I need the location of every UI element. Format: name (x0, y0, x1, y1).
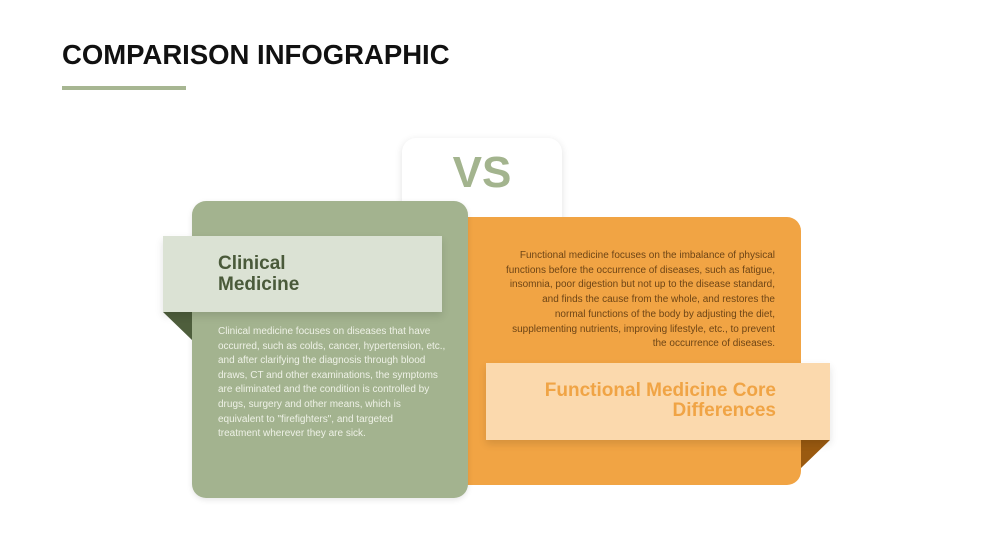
VS badge: VS (453, 148, 511, 197)
functional body text: supplementing nutrients, improving lifestyle, etc., to prevent (512, 324, 775, 335)
functional body text: functions before the occurrence of diseases, such as fatigue, (506, 265, 775, 276)
VS badge (402, 138, 562, 238)
title: COMPARISON INFOGRAPHIC (62, 39, 450, 70)
band: functional heading (486, 363, 830, 440)
functional body text: the occurrence of diseases. (653, 338, 775, 349)
clinical body text: Clinical medicine focuses on diseases that have (218, 326, 430, 337)
clinical body text (218, 326, 445, 439)
fold: orange (801, 440, 830, 468)
clinical body text: are eliminated and the condition is controlled by (218, 384, 429, 395)
clinical body text: drugs, surgery and other means, which is (218, 399, 401, 410)
functional body text: insomnia, poor digestion but not up to the disease standard, (510, 279, 775, 290)
band: clinical heading: Clinical (218, 253, 286, 274)
panel: functional medicine (462, 217, 801, 485)
band: functional heading: Functional Medicine Core (545, 380, 776, 401)
functional body text: normal functions of the body by adjusting the diet, (555, 309, 775, 320)
functional body text (506, 250, 775, 349)
panel: clinical medicine (192, 201, 468, 498)
clinical body text: occurred, such as colds, cancer, hypertension, etc., (218, 341, 445, 352)
clinical body text: draws, CT and other examinations, the symptoms (218, 370, 438, 381)
title underline (62, 86, 186, 90)
clinical body text: equivalent to "firefighters", and targeted (218, 414, 393, 425)
clinical body text: and after clarifying the diagnosis through blood (218, 355, 425, 366)
functional body text: Functional medicine focuses on the imbalance of physical (520, 250, 775, 261)
band: clinical heading (163, 236, 442, 312)
band: functional heading: Differences (672, 400, 776, 421)
clinical body text: treatment wherever they are sick. (218, 428, 366, 439)
band: clinical heading: Medicine (218, 274, 299, 295)
fold: green (163, 312, 192, 340)
functional body text: and finds the cause from the whole, and restores the (542, 294, 775, 305)
